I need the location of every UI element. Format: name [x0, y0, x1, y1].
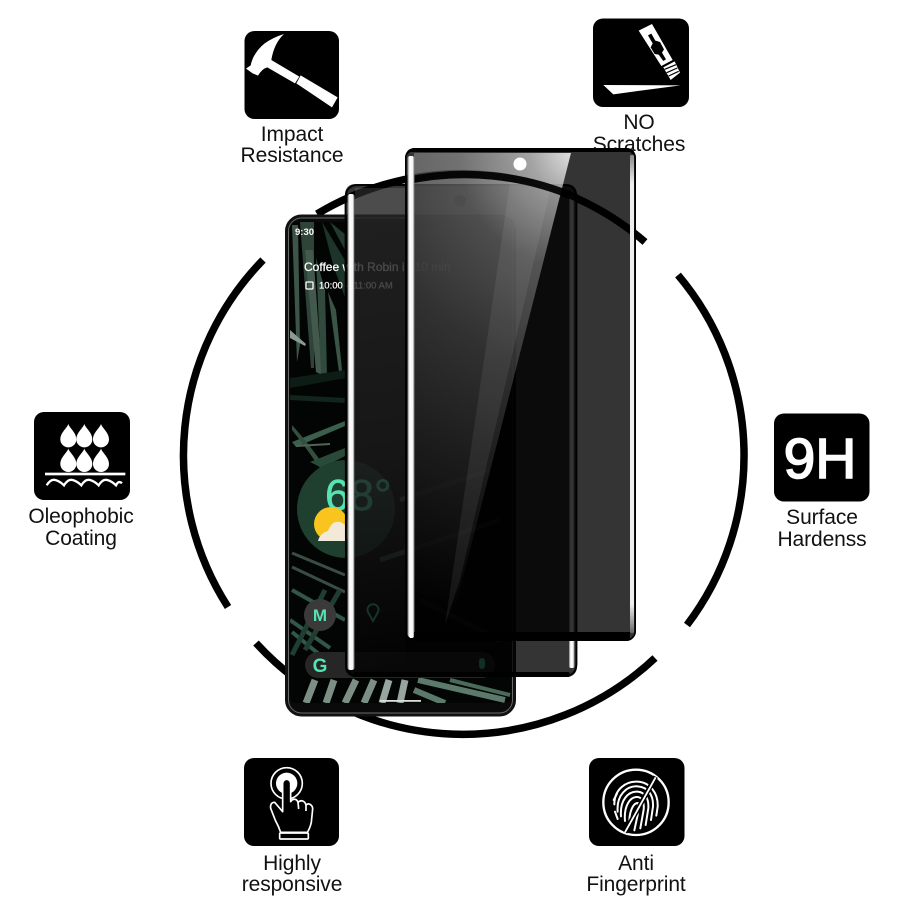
camera hole: [514, 158, 526, 170]
phone: [286, 216, 514, 715]
feature: no scratches: [593, 18, 689, 156]
maps icon: [367, 604, 378, 621]
calendar time: [306, 282, 313, 289]
label: Surface Hardenss: Hardenss: [777, 528, 867, 551]
front film outline: [406, 149, 635, 640]
label: Highly responsive: Highly: [263, 852, 321, 875]
calendar event: Coffee with Robin in 10 min: [304, 260, 451, 274]
front film left edge: [408, 156, 414, 638]
front film tint: [405, 148, 636, 641]
phone bezel highlight: [288, 218, 512, 713]
label: NO Scratches: Scratches: [593, 133, 685, 156]
search bar: [305, 652, 495, 678]
icon: blade scratching surface: [593, 18, 689, 107]
icon: hammer: [244, 31, 339, 119]
label: Surface Hardenss: Surface: [786, 506, 858, 529]
feature: impact resistance: [241, 31, 343, 167]
ring seen through film: [405, 175, 577, 198]
back film camera hole: [454, 195, 466, 207]
back film gloss: [355, 188, 405, 672]
gmail glyph: M: [313, 606, 327, 625]
icon: crossed-out fingerprint: [589, 758, 684, 846]
label: Anti Fingerprint: Fingerprint: [586, 873, 686, 896]
back film left edge: [348, 194, 354, 670]
label: Anti Fingerprint: Anti: [618, 852, 654, 875]
weather cloud icon: [318, 522, 349, 541]
feature: anti fingerprint: [586, 758, 686, 896]
label: Highly responsive: responsive: [242, 873, 342, 896]
feature circle ring: [183, 174, 744, 734]
back privacy film: [345, 184, 577, 677]
google glyph: G: [313, 656, 327, 677]
icon: 9H: 9H: [784, 427, 856, 491]
front film top band: [406, 148, 635, 156]
weather sun icon: [314, 507, 348, 537]
wallpaper leaves: [290, 222, 510, 703]
label: Oleophobic Coating: Coating: [45, 527, 117, 550]
label: Impact Resistance: Impact: [261, 123, 323, 146]
label: Impact Resistance: Resistance: [241, 144, 343, 167]
home bar: [380, 700, 421, 702]
feature: surface hardness: [774, 414, 870, 551]
feature: oleophobic coating: [28, 412, 134, 550]
phone screen: [290, 222, 511, 703]
gmail button: [304, 599, 336, 631]
icon: finger touching: [244, 758, 339, 846]
phone screen: 10:00 – 11:00 AM: [319, 280, 393, 292]
front film seam highlight: [445, 183, 552, 625]
clock: 9:30: [295, 227, 314, 238]
feature: highly responsive: [242, 758, 342, 896]
label: NO Scratches: NO: [623, 111, 655, 134]
back film tint: [345, 184, 577, 677]
front film glossy reflection: [414, 153, 571, 567]
phone body: [286, 216, 514, 715]
mic icon: [479, 658, 485, 669]
front film bottom band: [414, 632, 630, 640]
icon: water drops on coating: [34, 412, 130, 500]
front film right edge: [630, 155, 634, 633]
back film outline: [346, 185, 576, 676]
front privacy film: [405, 148, 636, 641]
label: Oleophobic Coating: Oleophobic: [28, 505, 134, 528]
back film right edge: [569, 195, 574, 668]
weather blob: [297, 460, 395, 558]
temperature: 68°: [325, 471, 392, 520]
back film bottom band: [354, 672, 570, 677]
